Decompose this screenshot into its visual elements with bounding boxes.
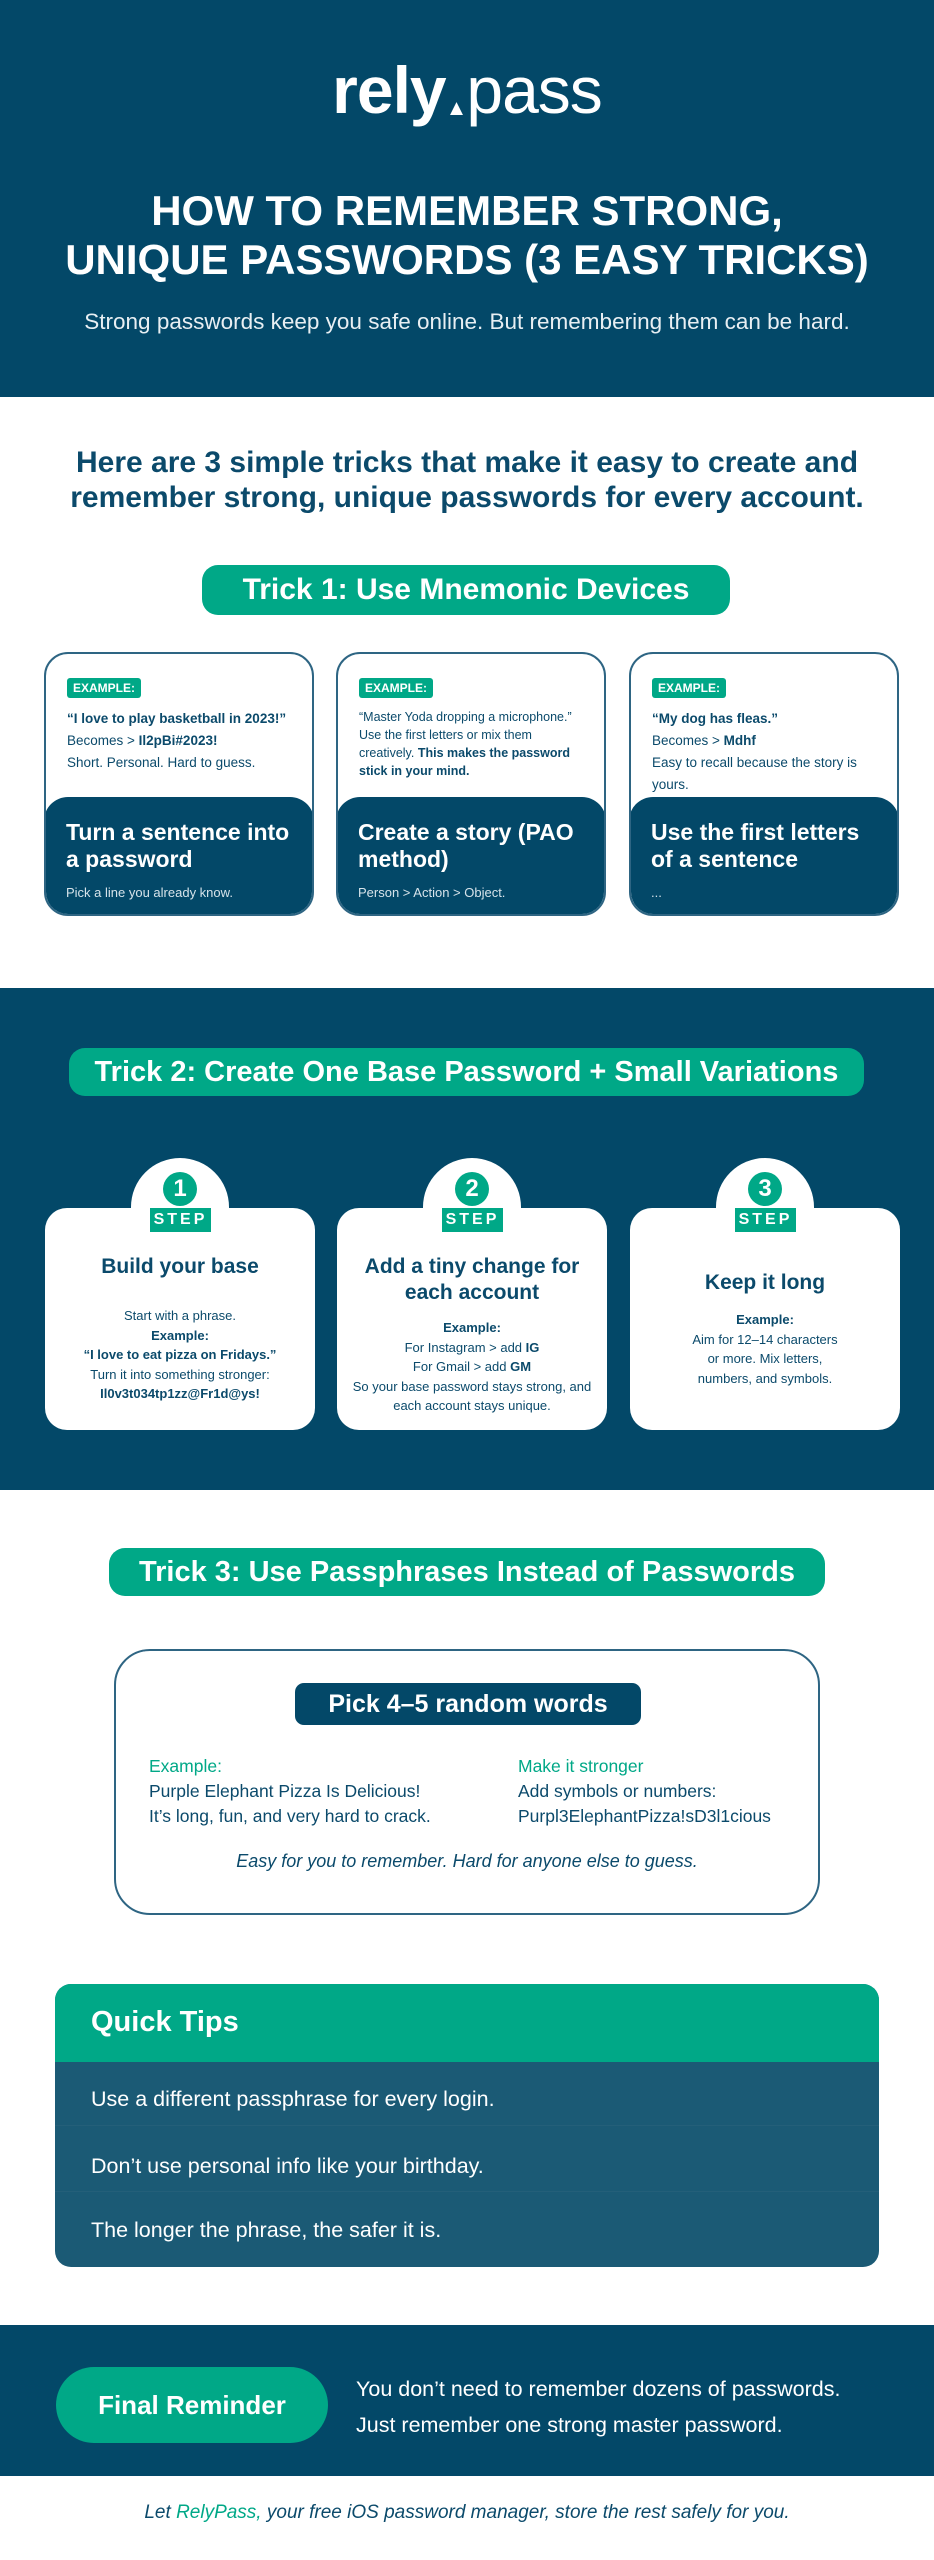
card: first letters: “My dog has fleas.” [652, 711, 778, 726]
step 1: “I love to eat pizza on Fridays.” [84, 1347, 276, 1362]
example column [149, 1756, 431, 1826]
intro text [70, 446, 864, 514]
trick 3 heading [109, 1548, 825, 1596]
stronger column: Add symbols or numbers: [518, 1781, 716, 1801]
step 3: 3 [758, 1175, 772, 1202]
step 2: STEP [446, 1211, 499, 1228]
header band [0, 0, 934, 397]
trick 3 heading: Trick 3: Use Passphrases Instead of Passwords [139, 1556, 795, 1588]
step 3 [630, 1158, 900, 1430]
card: sentence to password: Turn a sentence into a password [66, 819, 289, 872]
example column: It’s long, fun, and very hard to crack. [149, 1806, 431, 1826]
final reminder band [0, 2325, 934, 2476]
card: sentence to password [44, 652, 314, 916]
card: sentence to password: Short. Personal. Hard to guess. [67, 755, 255, 770]
step 1: Start with a phrase. [124, 1308, 236, 1323]
step 3: Aim for 12–14 characters [692, 1332, 838, 1346]
step 1: 1 [173, 1175, 187, 1202]
intro text: Here are 3 simple tricks that make it easy to create and [76, 446, 858, 479]
title [65, 187, 869, 283]
example column: Example: [149, 1756, 222, 1776]
card: sentence to password: Becomes > Il2pBi#2023! [67, 733, 217, 748]
quick tips panel: Use a different passphrase for every login. [91, 2087, 495, 2111]
final reminder pill [56, 2367, 328, 2443]
stronger column: Purpl3ElephantPizza!sD3l1cious [518, 1806, 771, 1826]
reminder text [356, 2377, 840, 2437]
step 2: So your base password stays strong, and each account stays unique. [353, 1378, 591, 1413]
card: first letters: ... [651, 885, 662, 900]
trick 2 heading [69, 1048, 864, 1096]
passphrase box [114, 1649, 820, 1915]
example column: Purple Elephant Pizza Is Delicious! [149, 1781, 420, 1801]
step 2: Add a tiny change for each account [365, 1255, 579, 1304]
card: PAO story: Person > Action > Object. [358, 885, 505, 900]
card: PAO story [336, 652, 606, 916]
step 1: Build your base [101, 1255, 259, 1278]
card: PAO story: Create a story (PAO method) [358, 819, 574, 872]
step 3: or more. Mix letters, [708, 1351, 822, 1366]
card: sentence to password: EXAMPLE: [73, 681, 135, 695]
step 2: For Gmail > add GM [413, 1359, 531, 1374]
final reminder pill: Final Reminder [98, 2390, 286, 2420]
tagline: Easy for you to remember. Hard for anyone else to guess. [236, 1851, 698, 1871]
card: first letters: Easy to recall because the story is yours. [652, 755, 857, 792]
step 2: For Instagram > add IG [405, 1340, 539, 1354]
step 1: STEP [154, 1211, 207, 1228]
footer: Let RelyPass, your free iOS password manager, store the rest safely for you. [144, 2502, 790, 2523]
reminder text: You don’t need to remember dozens of passwords. [356, 2377, 840, 2401]
step 1: Turn it into something stronger: [90, 1366, 270, 1382]
card: first letters [629, 652, 899, 916]
quick tips panel: The longer the phrase, the safer it is. [91, 2218, 441, 2242]
card: first letters: Use the first letters of a sentence [651, 819, 859, 872]
card: sentence to password: Pick a line you already know. [66, 885, 233, 900]
step 2: Example: [443, 1320, 501, 1335]
logo: rely▲pass [332, 53, 602, 127]
title: HOW TO REMEMBER STRONG, [151, 187, 783, 234]
trick 2 heading: Trick 2: Create One Base Password + Small Variations [95, 1056, 838, 1088]
step 3: Keep it long [705, 1271, 825, 1294]
card: PAO story: EXAMPLE: [365, 681, 427, 695]
title: UNIQUE PASSWORDS (3 EASY TRICKS) [65, 236, 869, 283]
intro text: remember strong, unique passwords for every account. [70, 481, 864, 514]
pick words label [295, 1683, 641, 1725]
subtitle: Strong passwords keep you safe online. But remembering them can be hard. [84, 309, 850, 334]
trick 1 heading [202, 565, 730, 615]
step 3: STEP [739, 1211, 792, 1228]
step 3: Example: [736, 1312, 794, 1327]
card: sentence to password: “I love to play basketball in 2023!” [67, 711, 286, 726]
quick tips panel: Don’t use personal info like your birthday. [91, 2154, 484, 2178]
reminder text: Just remember one strong master password. [356, 2413, 783, 2437]
quick tips panel: Quick Tips [91, 2006, 239, 2038]
stronger column: Make it stronger [518, 1756, 643, 1776]
card: PAO story: Use the first letters or mix them creatively. This makes the password stick in your mind. [359, 728, 570, 778]
step 2 [337, 1158, 607, 1430]
step 1 [45, 1158, 315, 1430]
trick 1 heading: Trick 1: Use Mnemonic Devices [243, 573, 689, 606]
stronger column [518, 1756, 771, 1826]
card: PAO story: “Master Yoda dropping a microphone.” [359, 710, 572, 724]
step 1: Il0v3t034tp1zz@Fr1d@ys! [100, 1386, 260, 1401]
pick words label: Pick 4–5 random words [328, 1690, 608, 1718]
step 2: 2 [465, 1175, 479, 1202]
card: first letters: Becomes > Mdhf [652, 733, 756, 748]
quick tips panel [55, 1984, 879, 2267]
step 3: numbers, and symbols. [698, 1370, 832, 1386]
card: first letters: EXAMPLE: [658, 681, 720, 695]
step 1: Example: [151, 1328, 209, 1342]
trick 2 section [0, 988, 934, 1490]
